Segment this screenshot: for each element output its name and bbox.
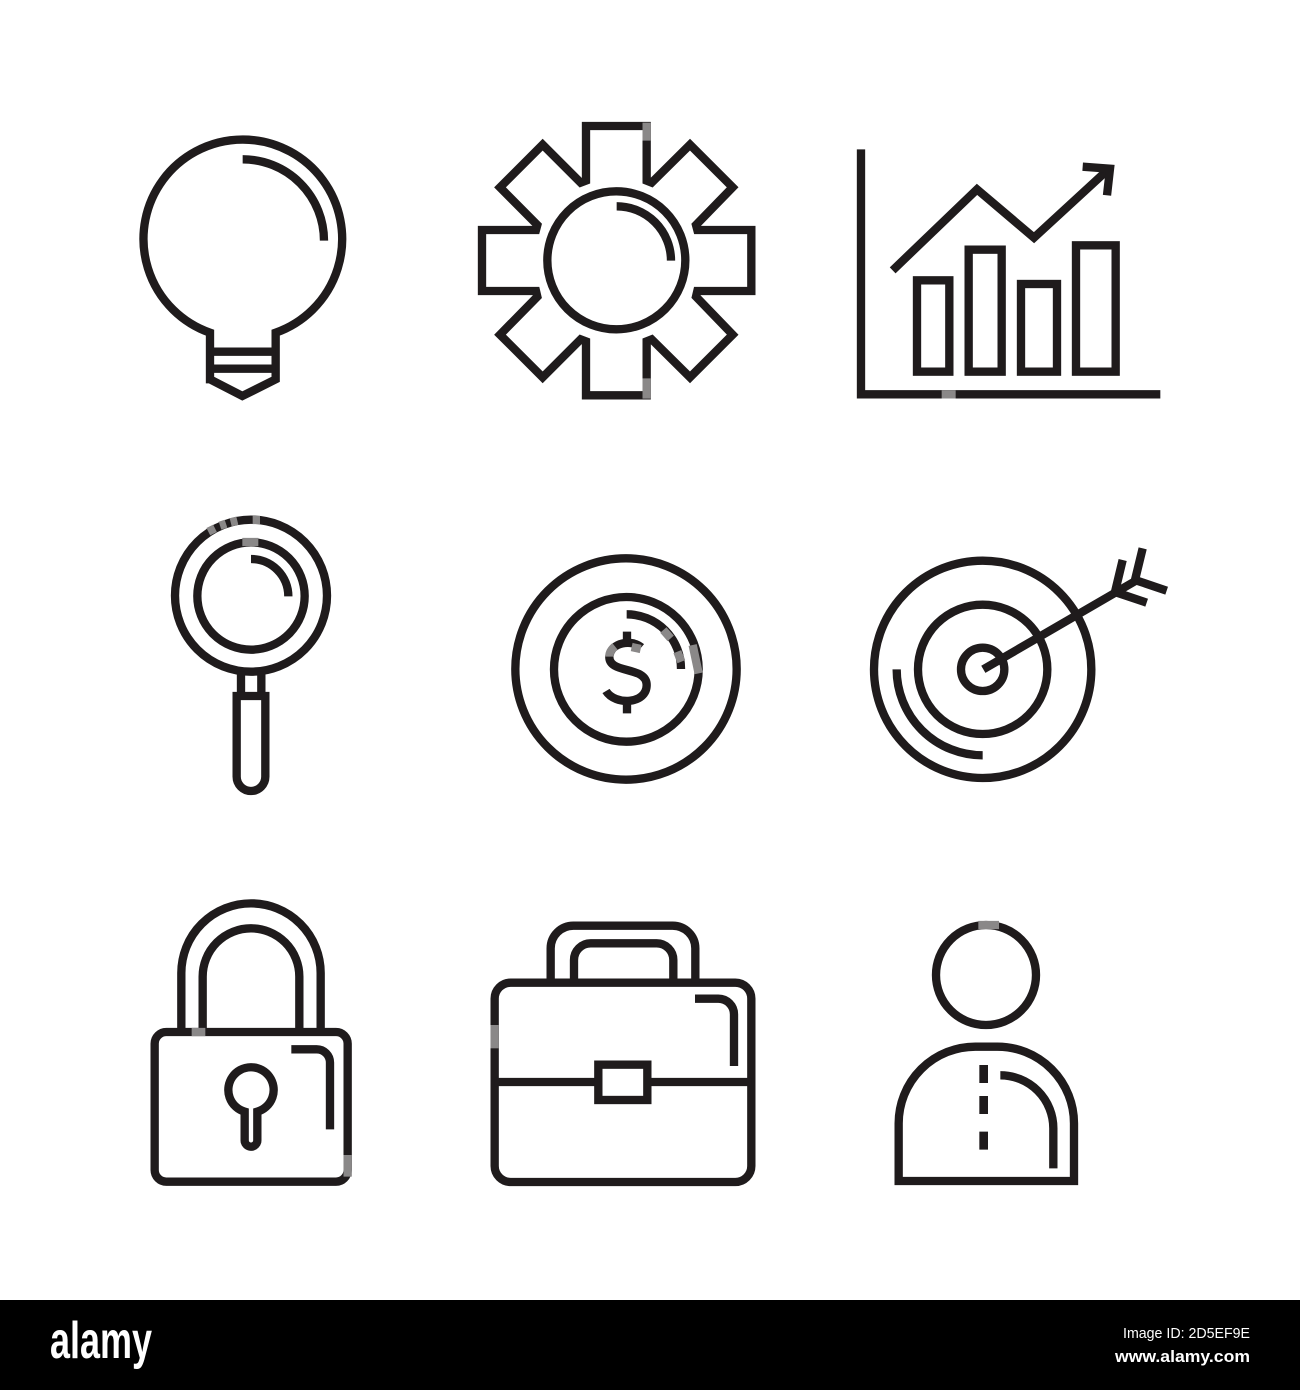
icon: light bulb (143, 140, 342, 396)
icon: magnifying glass (175, 520, 327, 791)
icon: gear (482, 123, 751, 399)
image id: Image ID: 2D5EF9E (1123, 1325, 1250, 1342)
icon: target with arrow (874, 548, 1167, 778)
footer logo: alamy (50, 1312, 152, 1370)
icon: person (899, 925, 1074, 1181)
icon: briefcase (495, 926, 751, 1182)
icon: growth chart (861, 149, 1160, 394)
icon: padlock (155, 903, 348, 1182)
footer bar (0, 1300, 1300, 1390)
website: www.alamy.com (1114, 1347, 1250, 1366)
icon: dollar coin (515, 558, 737, 780)
